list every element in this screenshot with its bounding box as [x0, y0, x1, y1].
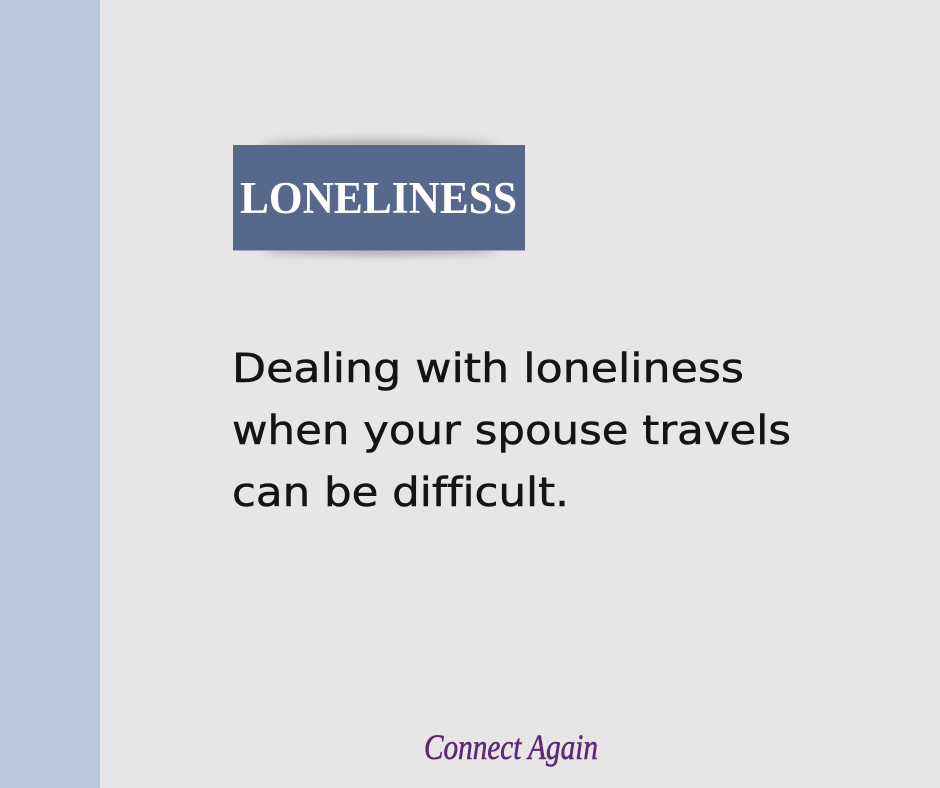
text block: body message: when your spouse travels — [232, 408, 791, 454]
brand signature: Connect Again — [424, 727, 598, 767]
text block: body message — [232, 346, 791, 516]
panel: left sidebar — [0, 0, 100, 788]
text block: body message: Dealing with loneliness — [232, 346, 744, 392]
text block: body message: can be difficult. — [232, 470, 569, 516]
title: LONELINESS — [240, 173, 517, 223]
title banner — [233, 140, 525, 255]
